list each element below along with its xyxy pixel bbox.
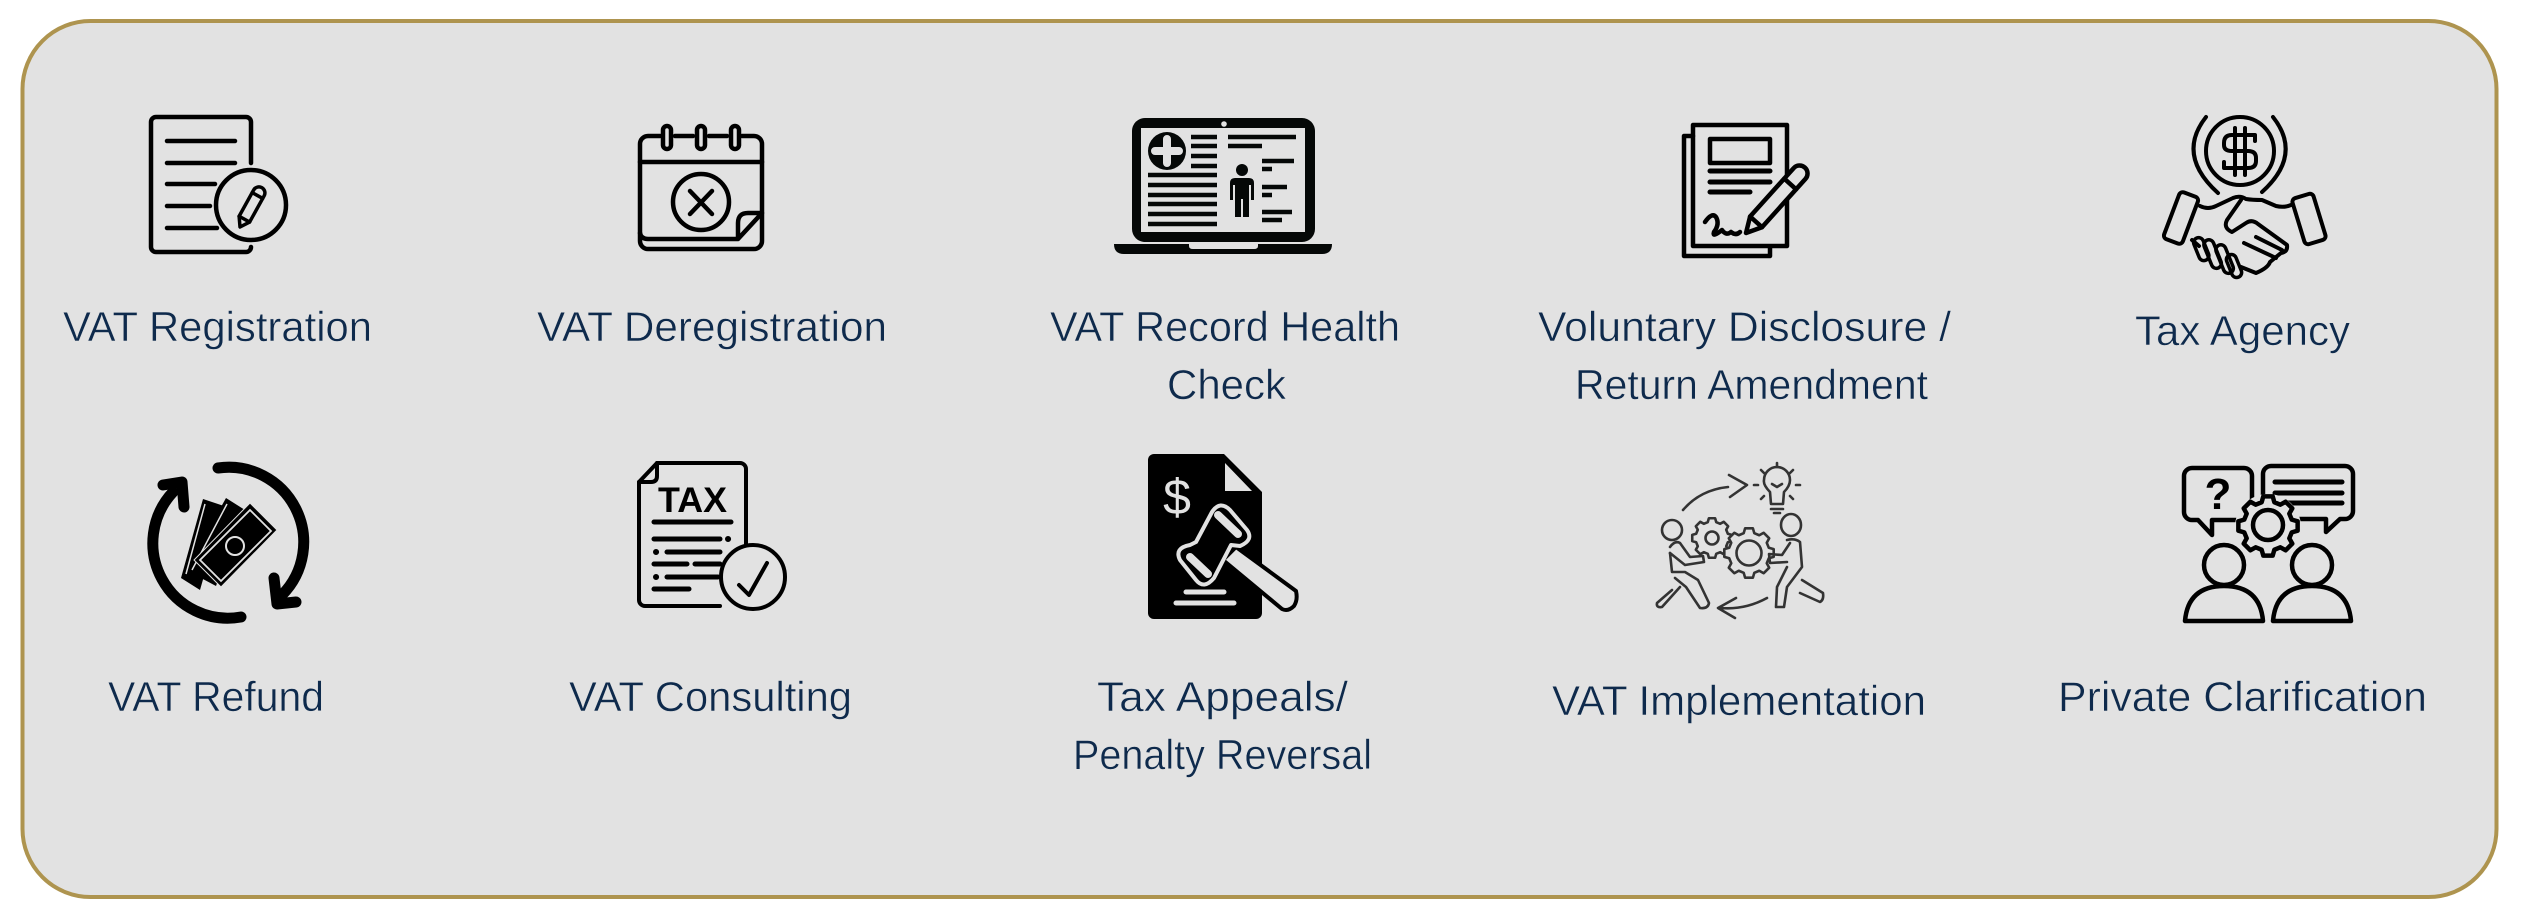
label: VAT Record Health Check: VAT Record Health	[1050, 303, 1400, 350]
service: VAT Consulting	[569, 463, 852, 720]
label: Tax Agency: Tax Agency	[2135, 307, 2350, 354]
service: VAT Registration	[63, 117, 372, 350]
icon: tax document with check mark: TAX	[658, 481, 728, 520]
icon: handshake with dollar coin	[2163, 117, 2327, 279]
service: Voluntary Disclosure / Return Amendment	[1538, 125, 1951, 408]
service: VAT Deregistration	[537, 126, 887, 350]
label: VAT Consulting: VAT Consulting	[569, 673, 852, 720]
label: VAT Refund: VAT Refund	[108, 673, 324, 720]
icon: tax document with gavel: $	[1163, 469, 1191, 525]
label: VAT Implementation: VAT Implementation	[1552, 677, 1926, 724]
label: VAT Deregistration: VAT Deregistration	[537, 303, 887, 350]
service: Private Clarification	[2058, 466, 2427, 720]
service: VAT Record Health Check	[1050, 118, 1400, 408]
label: VAT Registration: VAT Registration	[63, 303, 372, 350]
label: Voluntary Disclosure / Return Amendment: Return Amendment	[1575, 361, 1928, 408]
label: Tax Appeals / Penalty Reversal	[1073, 673, 1372, 778]
label: VAT Record Health Check	[1050, 303, 1400, 408]
label: Tax Appeals / Penalty Reversal: Tax Appeals/	[1097, 673, 1348, 720]
label: Voluntary Disclosure / Return Amendment: Voluntary Disclosure /	[1538, 303, 1951, 350]
service: VAT Implementation	[1552, 463, 1926, 724]
icon: tax document with gavel	[1148, 454, 1297, 619]
icon: banknotes with circular arrows	[153, 467, 304, 618]
icon: document with pencil	[151, 117, 286, 252]
label: VAT Record Health Check: Check	[1167, 361, 1287, 408]
label: Private Clarification: Private Clarification	[2058, 673, 2427, 720]
icon: team with gears and light bulb	[1657, 463, 1823, 618]
label: Voluntary Disclosure / Return Amendment	[1538, 303, 1951, 408]
icon: two people with speech bubbles and gear: ?	[2205, 470, 2231, 519]
icon: two people with speech bubbles and gear	[2184, 466, 2353, 621]
icon: laptop with health record	[1114, 118, 1332, 254]
service: Tax Agency	[2135, 117, 2350, 354]
icon: tax document with check mark	[639, 463, 785, 609]
service: Tax Appeals / Penalty Reversal	[1073, 454, 1372, 778]
service: VAT Refund	[108, 467, 324, 720]
icon: signed documents with pencil	[1684, 125, 1811, 256]
label: Tax Appeals / Penalty Reversal: Penalty Reversal	[1073, 731, 1372, 778]
icon: calendar with cross	[640, 126, 762, 249]
